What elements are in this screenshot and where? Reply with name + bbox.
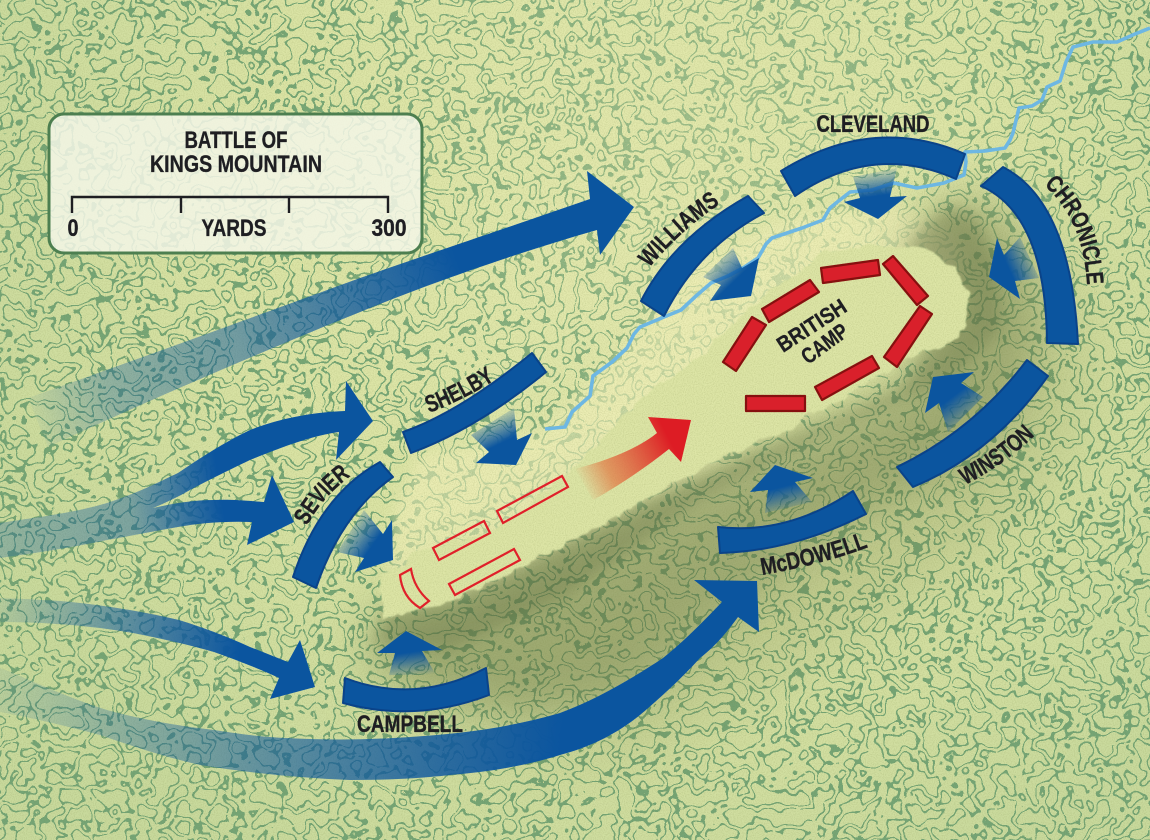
red arrow: British movement — [575, 417, 691, 500]
bar: Cleveland — [781, 138, 965, 196]
bar: Campbell — [343, 668, 489, 711]
bar: Williams — [641, 196, 764, 316]
scale labels — [68, 215, 406, 242]
river — [545, 28, 1150, 429]
label: McDowell: McDOWELL — [760, 534, 868, 575]
bar: Chronicle — [981, 167, 1078, 344]
label: Williams: WILLIAMS — [636, 192, 718, 266]
label: Sevier: SEVIER — [294, 465, 350, 524]
scale labels: 300 — [372, 215, 406, 242]
label: Campbell: CAMPBELL — [357, 711, 463, 738]
bar: Shelby — [403, 353, 546, 453]
legend title — [150, 127, 322, 178]
small attack arrow: Campbell — [377, 631, 442, 675]
label: Chronicle: CHRONICLE — [1047, 176, 1104, 284]
small attack arrow: Williams — [703, 248, 759, 301]
small attack arrow: McDowell — [750, 465, 813, 513]
arrow: forked Sevier approach — [0, 381, 373, 558]
legend title: BATTLE OF — [184, 127, 288, 154]
unit labels — [294, 111, 1104, 738]
scale labels: 0 — [68, 215, 78, 242]
initial British positions — [400, 476, 568, 608]
scale bar — [72, 197, 388, 213]
arrow: Campbell approach — [0, 598, 315, 699]
small attack arrow: Chronicle — [989, 237, 1039, 299]
bar: Winston — [897, 360, 1048, 487]
patriot force bars — [293, 138, 1078, 711]
label: British camp: BRITISH — [772, 294, 851, 357]
legend title: KINGS MOUNTAIN — [150, 151, 322, 178]
label: Shelby: SHELBY — [425, 366, 492, 412]
scale labels: YARDS — [202, 215, 266, 242]
bar: Sevier — [293, 462, 393, 588]
arrow: long northern flanking march — [28, 171, 634, 447]
label: British camp: CAMP — [796, 318, 853, 369]
small attack arrow: Sevier — [337, 510, 393, 572]
bar: McDowell — [718, 491, 866, 553]
British camp defensive lines — [723, 256, 932, 411]
label: Winston: WINSTON — [957, 424, 1034, 484]
label: Cleveland: CLEVELAND — [816, 111, 930, 138]
arrow: McDowell approach — [0, 580, 759, 780]
hilltop clearing — [380, 245, 970, 619]
hill shadow — [365, 190, 1085, 745]
legend panel — [49, 114, 422, 253]
small attack arrow: Winston — [925, 372, 983, 432]
small attack arrow: Shelby — [471, 408, 532, 465]
pale forest on the hill's north slope — [385, 205, 960, 610]
small attack arrow: Cleveland — [844, 168, 907, 219]
